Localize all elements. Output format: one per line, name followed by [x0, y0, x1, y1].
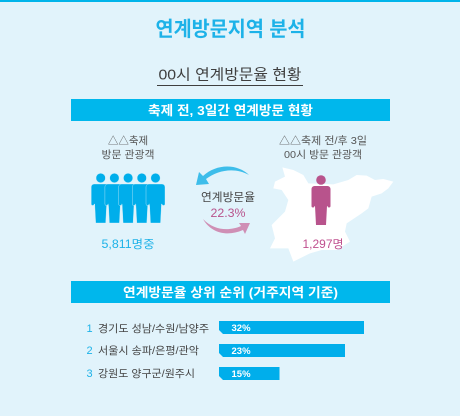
rate label: 연계방문율: [201, 191, 255, 204]
ranking row 2: 서울시 송파/은평/관악: [98, 345, 199, 357]
rate label: 22.3%: [210, 206, 246, 220]
banner: section one heading: 축제 전, 3일간 연계방문 현황: [148, 103, 313, 118]
ranking row 2: 23%: [232, 346, 251, 357]
arrow: pink: [203, 219, 250, 234]
ranking row 1: 32%: [232, 323, 251, 334]
banner: section one heading: [71, 99, 390, 121]
visitors count: 5,811명중: [102, 238, 154, 251]
visitors count on map: 1,297명: [302, 238, 344, 251]
label: festival visitors: 방문 관광객: [102, 149, 154, 161]
subtitle: 00시 연계방문율 현황: [158, 66, 302, 84]
banner: section two heading: 연계방문율 상위 순위 (거주지역 기준): [123, 285, 338, 300]
map silhouette: [270, 167, 393, 262]
label: visitors before and after: 00시 방문 관광객: [284, 149, 362, 161]
ranking row 1: [86, 321, 364, 335]
label: festival visitors: △△축제: [108, 135, 148, 147]
label: visitors before and after: [279, 134, 367, 161]
ranking row 3: 15%: [232, 369, 251, 380]
label: festival visitors: [102, 135, 154, 161]
ranking row 2: [86, 344, 345, 357]
ranking row 3: 강원도 양구군/원주시: [98, 368, 195, 380]
banner: section two heading: [71, 281, 390, 303]
ranking row 3: 3: [86, 368, 93, 380]
arrow: blue: [196, 166, 249, 185]
icon: visitor on map: [312, 175, 330, 225]
ranking row 3: [86, 367, 280, 380]
ranking row 1: 경기도 성남/수원/남양주: [98, 322, 209, 335]
ranking row 1: 1: [86, 323, 93, 335]
icon: five visitors: [91, 173, 165, 223]
title: 연계방문지역 분석: [156, 18, 306, 41]
ranking row 2: 2: [86, 345, 93, 357]
rate label: [201, 191, 255, 220]
label: visitors before and after: △△축제 전/후 3일: [279, 134, 367, 147]
